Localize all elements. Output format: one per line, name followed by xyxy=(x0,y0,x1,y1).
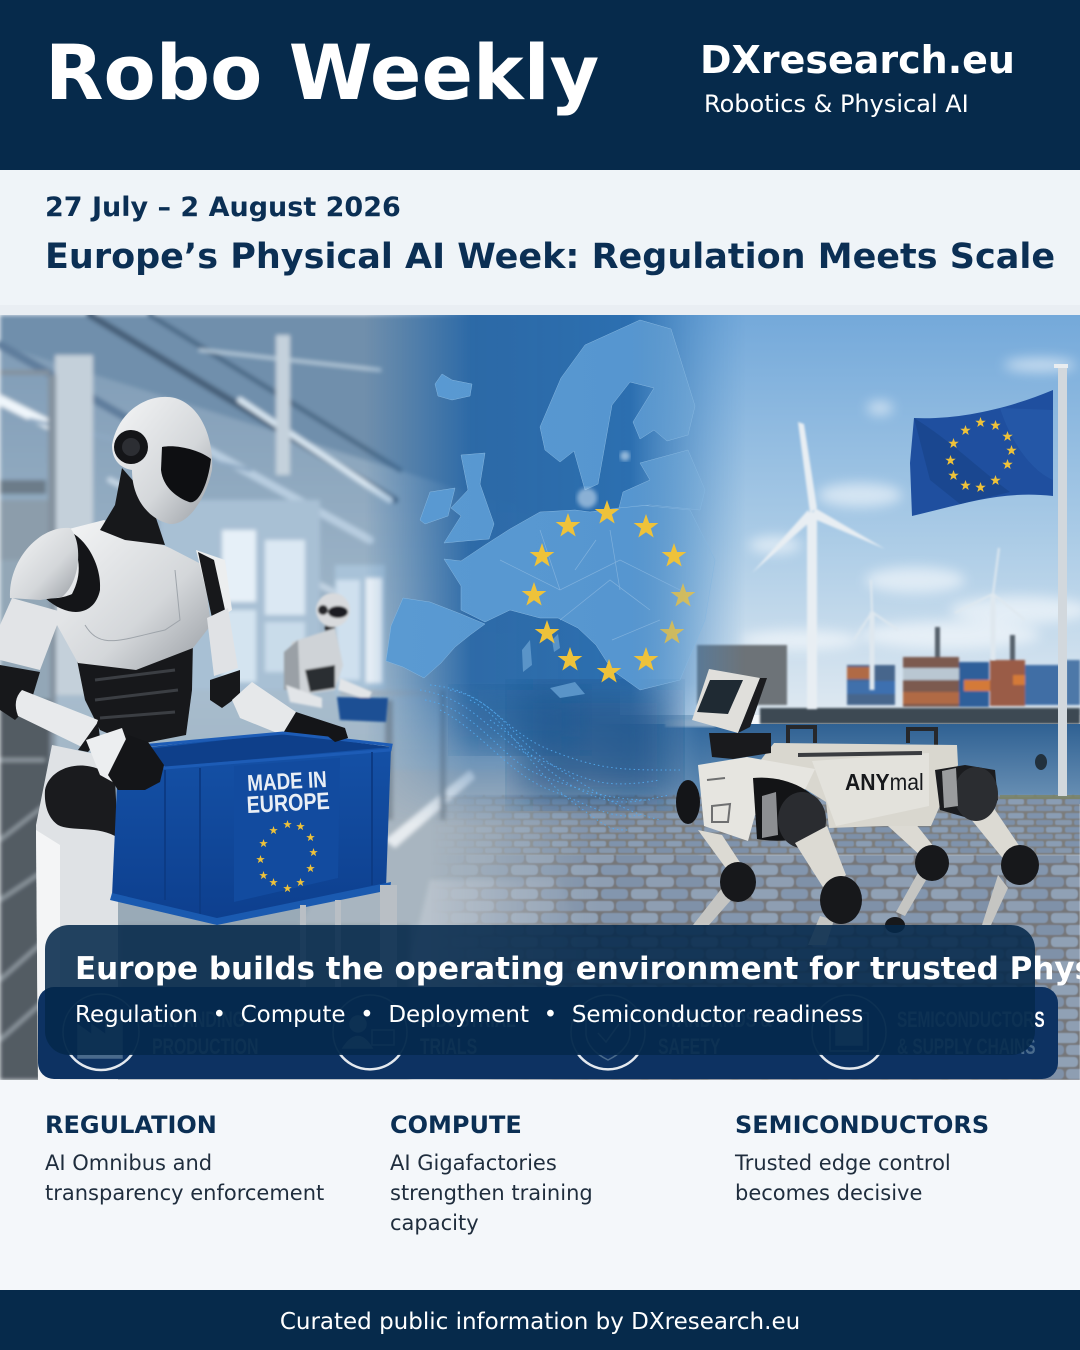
crate label xyxy=(245,767,330,819)
neck xyxy=(100,468,165,545)
ANYmal label: ANYmal xyxy=(845,769,924,795)
legend labels baked in artwork: TRIALS xyxy=(420,1036,477,1060)
factory floor xyxy=(230,770,700,1080)
clipped white legend remnants: & SUPPLY CHAINS xyxy=(897,1035,1035,1060)
factory background xyxy=(0,315,700,1080)
legend labels baked in artwork: SAFETY xyxy=(658,1036,721,1060)
column heading: REGULATION xyxy=(45,1111,217,1139)
header band xyxy=(0,0,1080,170)
legend labels baked in artwork: & SUPPLY CHAINS xyxy=(897,1035,1035,1060)
Europe map xyxy=(386,320,715,830)
islands xyxy=(522,634,585,698)
legend labels baked in artwork: PRODUCTION xyxy=(152,1036,258,1060)
light strip above hero xyxy=(0,305,1080,315)
rack on far left xyxy=(0,370,50,375)
legend labels baked in artwork: INDUSTRIAL xyxy=(420,1009,516,1033)
front legs xyxy=(698,830,743,871)
left arm xyxy=(45,530,100,612)
crate stars xyxy=(256,820,318,892)
footer band xyxy=(0,1290,1080,1350)
column text: AI Omnibus and transparency enforcement xyxy=(45,1151,324,1205)
mast xyxy=(709,733,771,759)
caption panel xyxy=(45,925,1035,1055)
column: regulation xyxy=(45,1111,324,1205)
crate label: MADE IN xyxy=(247,767,327,797)
actuators xyxy=(676,780,700,824)
gripping hand xyxy=(86,728,135,785)
sensor head xyxy=(692,669,760,733)
main humanoid robot xyxy=(0,397,348,1080)
column heading: COMPUTE xyxy=(390,1111,522,1139)
ceiling beams xyxy=(0,315,400,610)
body xyxy=(760,743,958,828)
date: 27 July – 2 August 2026 xyxy=(45,192,401,223)
EU star ring xyxy=(522,500,695,683)
baked legend strip xyxy=(38,987,1058,1079)
hero illustration xyxy=(0,315,1080,1080)
EU flag xyxy=(910,364,1068,796)
crate label: EUROPE xyxy=(246,787,330,819)
map blue field xyxy=(365,315,745,825)
cobblestone ground xyxy=(400,795,1080,1080)
legend labels baked in artwork: EXPANDING xyxy=(152,1009,245,1033)
factory windows xyxy=(160,500,320,690)
headline: Europe’s Physical AI Week: Regulation Meets Scale xyxy=(45,237,1055,277)
data stream xyxy=(420,685,680,830)
right arm xyxy=(196,550,232,620)
brand tagline: Robotics & Physical AI xyxy=(704,90,969,118)
legend labels baked in artwork: SEMICONDUCTORS xyxy=(897,1008,1045,1033)
background robot xyxy=(284,593,388,722)
legend icons baked in artwork xyxy=(63,994,886,1070)
column text: AI Gigafactories strengthen training capacity xyxy=(390,1151,593,1235)
helmet xyxy=(112,397,212,524)
column heading: SEMICONDUCTORS xyxy=(735,1111,989,1139)
legend labels baked in artwork xyxy=(152,1008,1045,1060)
date and headline band xyxy=(0,170,1080,315)
brand name: DXresearch.eu xyxy=(700,38,1015,82)
title: Robo Weekly xyxy=(45,28,599,117)
torso xyxy=(57,520,211,670)
handles xyxy=(788,727,936,745)
abdomen xyxy=(76,640,193,745)
footer text: Curated public information by DXresearch.eu xyxy=(280,1309,800,1335)
caption subline: Regulation • Compute • Deployment • Semiconductor readiness xyxy=(75,1002,863,1028)
legend labels baked in artwork: STANDARDS & xyxy=(658,1009,772,1033)
column: semiconductors xyxy=(734,1111,989,1205)
rear legs xyxy=(888,823,934,857)
landmass xyxy=(386,320,715,690)
column: compute xyxy=(390,1111,593,1235)
sky and harbour background xyxy=(400,315,1080,1080)
legs xyxy=(36,745,118,1080)
clipped white legend remnants xyxy=(1035,1012,1044,1027)
column text: Trusted edge control becomes decisive xyxy=(735,1151,951,1205)
ANYmal quadruped robot xyxy=(676,669,1039,945)
blue crate xyxy=(86,722,397,1005)
clipped white legend remnants: SEMICONDUCTORS xyxy=(897,1008,1045,1033)
wind turbines xyxy=(752,422,1025,709)
